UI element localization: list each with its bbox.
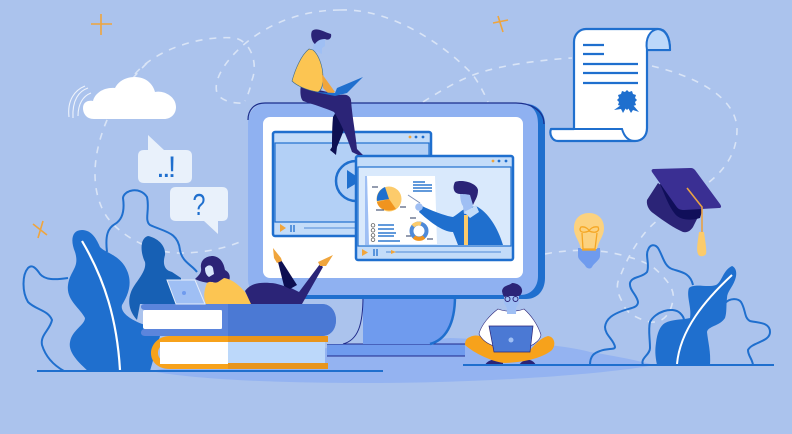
head <box>504 294 519 314</box>
shoes <box>485 359 536 365</box>
monitor stand <box>327 296 465 356</box>
hair <box>195 256 230 294</box>
graduation cap <box>647 168 721 256</box>
speech bubble: exclamation: ..! <box>156 151 174 184</box>
books <box>141 304 336 369</box>
sweater <box>204 278 252 304</box>
outline plant right <box>725 299 770 365</box>
back leg <box>330 100 351 155</box>
torso <box>292 49 323 92</box>
big leaf <box>68 230 160 371</box>
ground shadow <box>150 338 655 383</box>
man sitting on monitor <box>292 29 363 155</box>
speech bubble: question: ? <box>193 187 205 222</box>
laptop <box>167 280 205 304</box>
seal <box>614 90 639 113</box>
top book <box>141 304 336 336</box>
plant outline left <box>24 266 68 371</box>
man with laptop on floor <box>465 283 554 365</box>
laptop <box>315 77 363 96</box>
pie chart <box>376 186 402 212</box>
speech bubble: question <box>170 187 228 234</box>
leaf vein <box>677 275 732 364</box>
leaf vein <box>82 241 120 370</box>
leaf <box>655 266 736 365</box>
legs <box>465 336 554 363</box>
front leg <box>300 85 363 155</box>
monitor <box>248 103 545 299</box>
cloud with wifi <box>69 77 176 119</box>
sparkles <box>33 14 508 238</box>
play button <box>336 161 376 201</box>
plant outline back <box>106 190 197 272</box>
outline plant small <box>642 310 684 365</box>
woman lying on books <box>167 248 333 304</box>
right plants <box>590 245 770 365</box>
back video window <box>273 132 431 236</box>
outline plant large <box>590 245 693 365</box>
slide board <box>365 176 437 245</box>
donut chart <box>412 224 426 238</box>
ground lines <box>37 365 774 371</box>
front video window <box>356 156 513 260</box>
shoes <box>273 248 333 266</box>
certificate scroll <box>550 29 670 141</box>
arm <box>322 74 335 95</box>
text lines <box>378 182 432 241</box>
dark leaf <box>129 236 181 320</box>
head <box>313 38 325 54</box>
screen <box>263 117 523 278</box>
speech bubble: exclamation <box>138 135 192 184</box>
legs <box>245 264 323 304</box>
torso <box>479 309 541 346</box>
glasses <box>505 296 518 302</box>
laptop <box>489 326 533 352</box>
bottom book <box>151 336 328 369</box>
presenter <box>408 181 503 245</box>
left plants <box>24 190 197 371</box>
light bulb <box>574 213 604 268</box>
dashed paths <box>95 10 737 322</box>
